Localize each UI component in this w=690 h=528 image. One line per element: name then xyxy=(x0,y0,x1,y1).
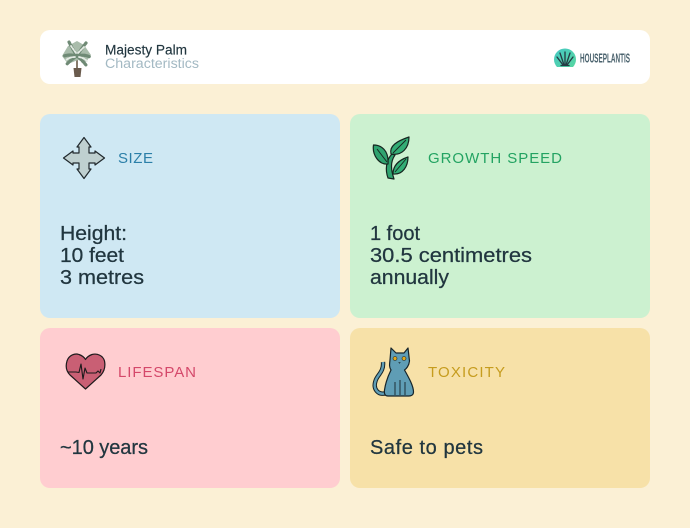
header bar xyxy=(40,30,650,84)
title: Majesty Palm xyxy=(105,42,187,58)
text: growth values: 30.5 centimetres xyxy=(370,245,532,267)
text: size values: Height: xyxy=(60,223,127,245)
panel: lifespan xyxy=(40,328,340,488)
text: toxicity value: Safe to pets xyxy=(370,437,483,459)
panel: size xyxy=(40,114,340,318)
icon: leafy sprout xyxy=(373,137,409,179)
panel: growth speed xyxy=(350,114,650,318)
heading: lifespan: LIFESPAN xyxy=(118,364,196,381)
heading: growth speed: GROWTH SPEED xyxy=(428,150,562,167)
heading: toxicity: TOXICITY xyxy=(428,364,505,381)
text: size values: 3 metres xyxy=(60,267,144,289)
text: growth values: annually xyxy=(370,267,449,289)
text: lifespan value: ~10 years xyxy=(60,437,148,459)
text: growth values xyxy=(370,223,532,289)
icon: sitting cat xyxy=(375,348,414,396)
heading: size: SIZE xyxy=(118,150,153,167)
icon: heart with pulse xyxy=(66,354,105,389)
icon: four-way arrows xyxy=(64,138,104,178)
logo: Houseplantis xyxy=(554,48,630,67)
subtitle: Characteristics xyxy=(105,56,199,71)
text: size values xyxy=(60,223,144,289)
icon: potted palm xyxy=(62,41,91,77)
header bar: HOUSEPLANTIS xyxy=(580,50,630,66)
text: size values: 10 feet xyxy=(60,245,124,267)
text: growth values: 1 foot xyxy=(370,223,420,245)
panel: toxicity xyxy=(350,328,650,488)
